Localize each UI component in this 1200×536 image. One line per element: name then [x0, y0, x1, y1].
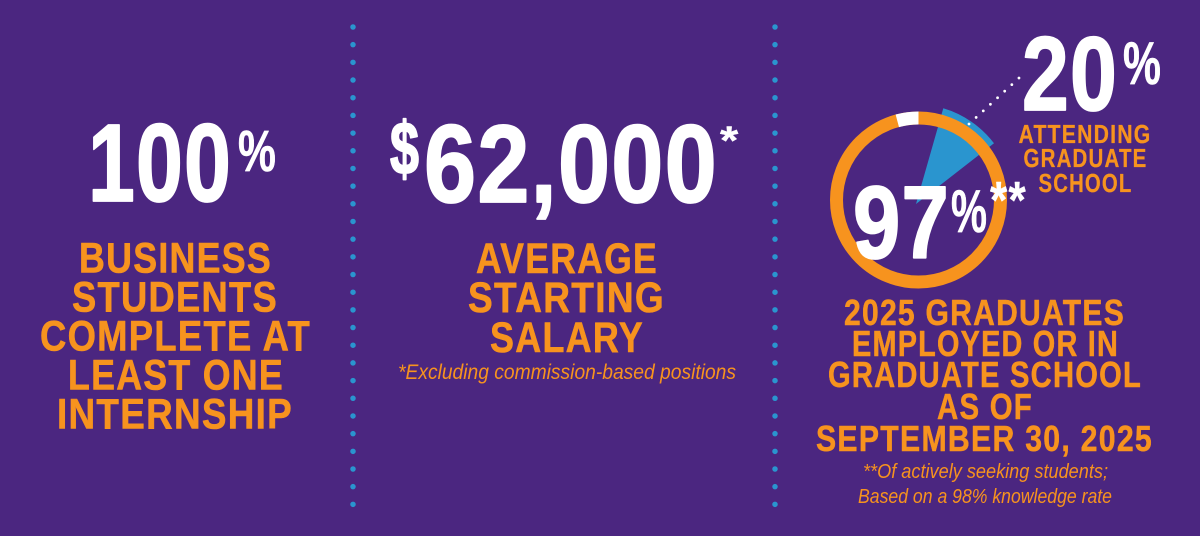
stat: 97%** — [853, 165, 1027, 280]
text block: salary description: SALARY — [490, 314, 644, 362]
divider: right dotted line — [772, 27, 778, 505]
text block: internship description: INTERNSHIP — [57, 390, 293, 438]
panel: graduate outcomes — [816, 16, 1162, 508]
footnote: knowledge rate: **Of actively seeking students; — [863, 461, 1108, 483]
text block: employment description: AS OF — [937, 386, 1033, 427]
text block: internship description: COMPLETE AT — [40, 312, 311, 360]
wedge: 20% attending graduate school — [916, 108, 994, 204]
text block: employment description — [816, 292, 1153, 459]
stat: 97%**: % — [951, 178, 988, 245]
text block: employment description: 2025 GRADUATES — [844, 292, 1125, 333]
divider: left dotted line — [350, 27, 356, 505]
stat: 20%: 20 — [1022, 16, 1118, 133]
text block: attending graduate school: ATTENDING — [1018, 119, 1152, 149]
text block: employment description: EMPLOYED OR IN — [852, 323, 1119, 364]
text block: attending graduate school — [1018, 119, 1152, 198]
stat: $62,000*: 62,000 — [424, 103, 718, 226]
stat: $62,000*: $ — [390, 107, 420, 190]
footnote: commission: *Excluding commission-based positions — [398, 361, 736, 384]
stat: 20%: % — [1123, 30, 1162, 97]
text block: internship description — [40, 234, 311, 438]
chart: 97% ring with 20% wedge — [836, 78, 1019, 282]
text block: internship description: BUSINESS — [79, 234, 272, 282]
panel: starting salary — [390, 103, 740, 384]
text block: attending graduate school: SCHOOL — [1038, 168, 1132, 198]
text block: internship description: STUDENTS — [72, 274, 278, 322]
dotted leader line — [969, 78, 1019, 124]
text block: internship description: LEAST ONE — [68, 352, 284, 400]
stat: 97%**: 97 — [853, 165, 950, 280]
stat: $62,000*: * — [720, 119, 740, 163]
stat: 97%**: ** — [990, 172, 1027, 230]
text block: salary description: STARTING — [468, 274, 665, 322]
footnote: knowledge rate: Based on a 98% knowledge rate — [858, 486, 1112, 508]
ring: employed portion — [836, 118, 1000, 282]
ring: white remainder — [897, 118, 918, 121]
text block: attending graduate school: GRADUATE — [1024, 143, 1148, 173]
panel: internships — [40, 102, 311, 438]
text block: salary description — [468, 235, 665, 362]
footnote: knowledge rate — [858, 461, 1112, 508]
stat: 100%: 100 — [88, 102, 232, 225]
text block: salary description: AVERAGE — [476, 235, 658, 283]
stat: 100%: % — [238, 119, 277, 184]
